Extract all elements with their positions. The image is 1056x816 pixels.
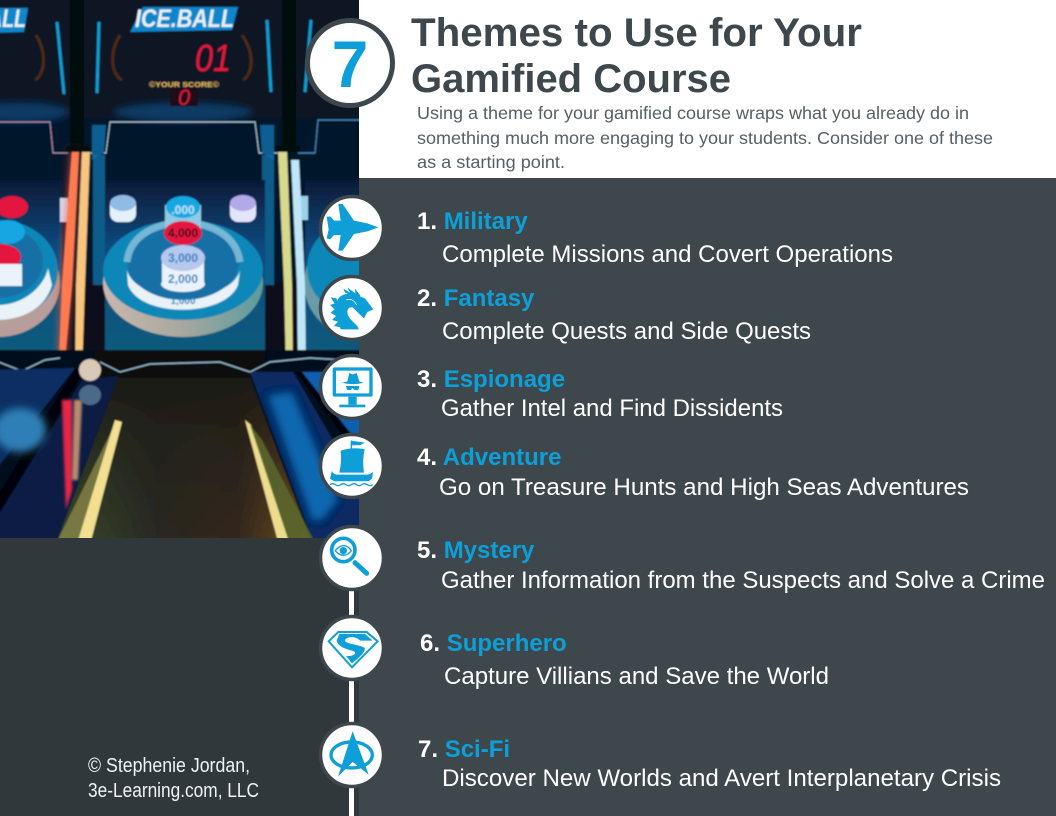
timeline line <box>349 558 354 816</box>
theme 1: military: Complete Missions and Covert Operations <box>442 241 893 268</box>
icon: dragon head <box>320 276 384 340</box>
panel: dark theme list background <box>359 178 1056 816</box>
icon: fighter jet <box>320 196 384 260</box>
photo: play floor <box>0 180 380 350</box>
title <box>411 11 862 101</box>
theme 2: fantasy: Complete Quests and Side Quests <box>442 318 811 345</box>
photo: neon light strips <box>58 146 306 372</box>
photo: skee-ball arcade machines <box>0 0 359 538</box>
photo: ICE BALL logos and scoreboard: ICE.BALL <box>135 5 234 33</box>
icon: magnifier with eye <box>320 526 384 590</box>
theme 5: mystery <box>417 537 1045 594</box>
theme 2: fantasy <box>417 285 811 345</box>
theme 7: sci-fi: 7. Sci-Fi <box>418 736 510 763</box>
theme 3: espionage: 3. Espionage <box>417 366 565 393</box>
theme 4: adventure: 4. Adventure <box>417 444 561 471</box>
photo: ICE BALL logos and scoreboard: 01 <box>195 38 231 80</box>
title: Themes to Use for Your <box>411 11 862 55</box>
theme 6: superhero: Capture Villians and Save the World <box>444 663 829 690</box>
panel: dark credit block <box>0 538 359 816</box>
theme 6: superhero: 6. Superhero <box>420 630 567 657</box>
intro text: Using a theme for your gamified course wraps what you already do in <box>417 103 969 123</box>
photo: score rings: 1,000 <box>170 296 196 307</box>
photo: ICE BALL logos and scoreboard <box>0 5 311 110</box>
photo: score rings <box>0 194 359 338</box>
theme 4: adventure <box>417 444 969 501</box>
theme 7: sci-fi <box>418 736 1001 792</box>
photo: upper back panels <box>0 0 380 285</box>
photo: score rings: .000 <box>171 203 195 217</box>
icon: viking ship <box>320 434 384 498</box>
photo: ICE BALL logos and scoreboard: 0 <box>178 85 191 110</box>
theme 3: espionage: Gather Intel and Find Dissidents <box>441 395 783 422</box>
credit text <box>88 755 259 802</box>
big number badge: 7 <box>332 27 368 101</box>
theme 3: espionage <box>417 366 783 422</box>
icon: superhero shield <box>320 616 384 680</box>
photo: lower ball return and lane <box>0 349 359 538</box>
theme 4: adventure: Go on Treasure Hunts and High Seas Adventures <box>439 474 969 501</box>
credit text: © Stephenie Jordan, <box>88 755 250 777</box>
photo: score rings: 2,000 <box>168 272 198 286</box>
theme 1: military: 1. Military <box>417 208 528 235</box>
title: Gamified Course <box>411 57 731 101</box>
theme 7: sci-fi: Discover New Worlds and Avert Interplanetary Crisis <box>442 765 1001 792</box>
intro text: as a starting point. <box>417 152 565 172</box>
big number badge <box>308 20 392 106</box>
intro text: something much more engaging to your students. Consider one of these <box>417 128 993 148</box>
credit text: 3e-Learning.com, LLC <box>88 780 259 802</box>
theme 5: mystery: 5. Mystery <box>417 537 535 564</box>
icon: spy on monitor <box>320 356 384 418</box>
icon: sci-fi delta badge <box>320 724 384 786</box>
photo: score rings: 3,000 <box>168 251 198 265</box>
theme 5: mystery: Gather Information from the Suspects and Solve a Crime <box>441 567 1045 594</box>
intro text <box>417 103 993 172</box>
photo: score rings: 4,000 <box>168 226 198 240</box>
theme 2: fantasy: 2. Fantasy <box>417 285 535 312</box>
photo: ICE BALL logos and scoreboard: ©YOUR SCORE© <box>149 80 220 89</box>
theme 1: military <box>417 208 893 268</box>
theme 6: superhero <box>420 630 829 690</box>
